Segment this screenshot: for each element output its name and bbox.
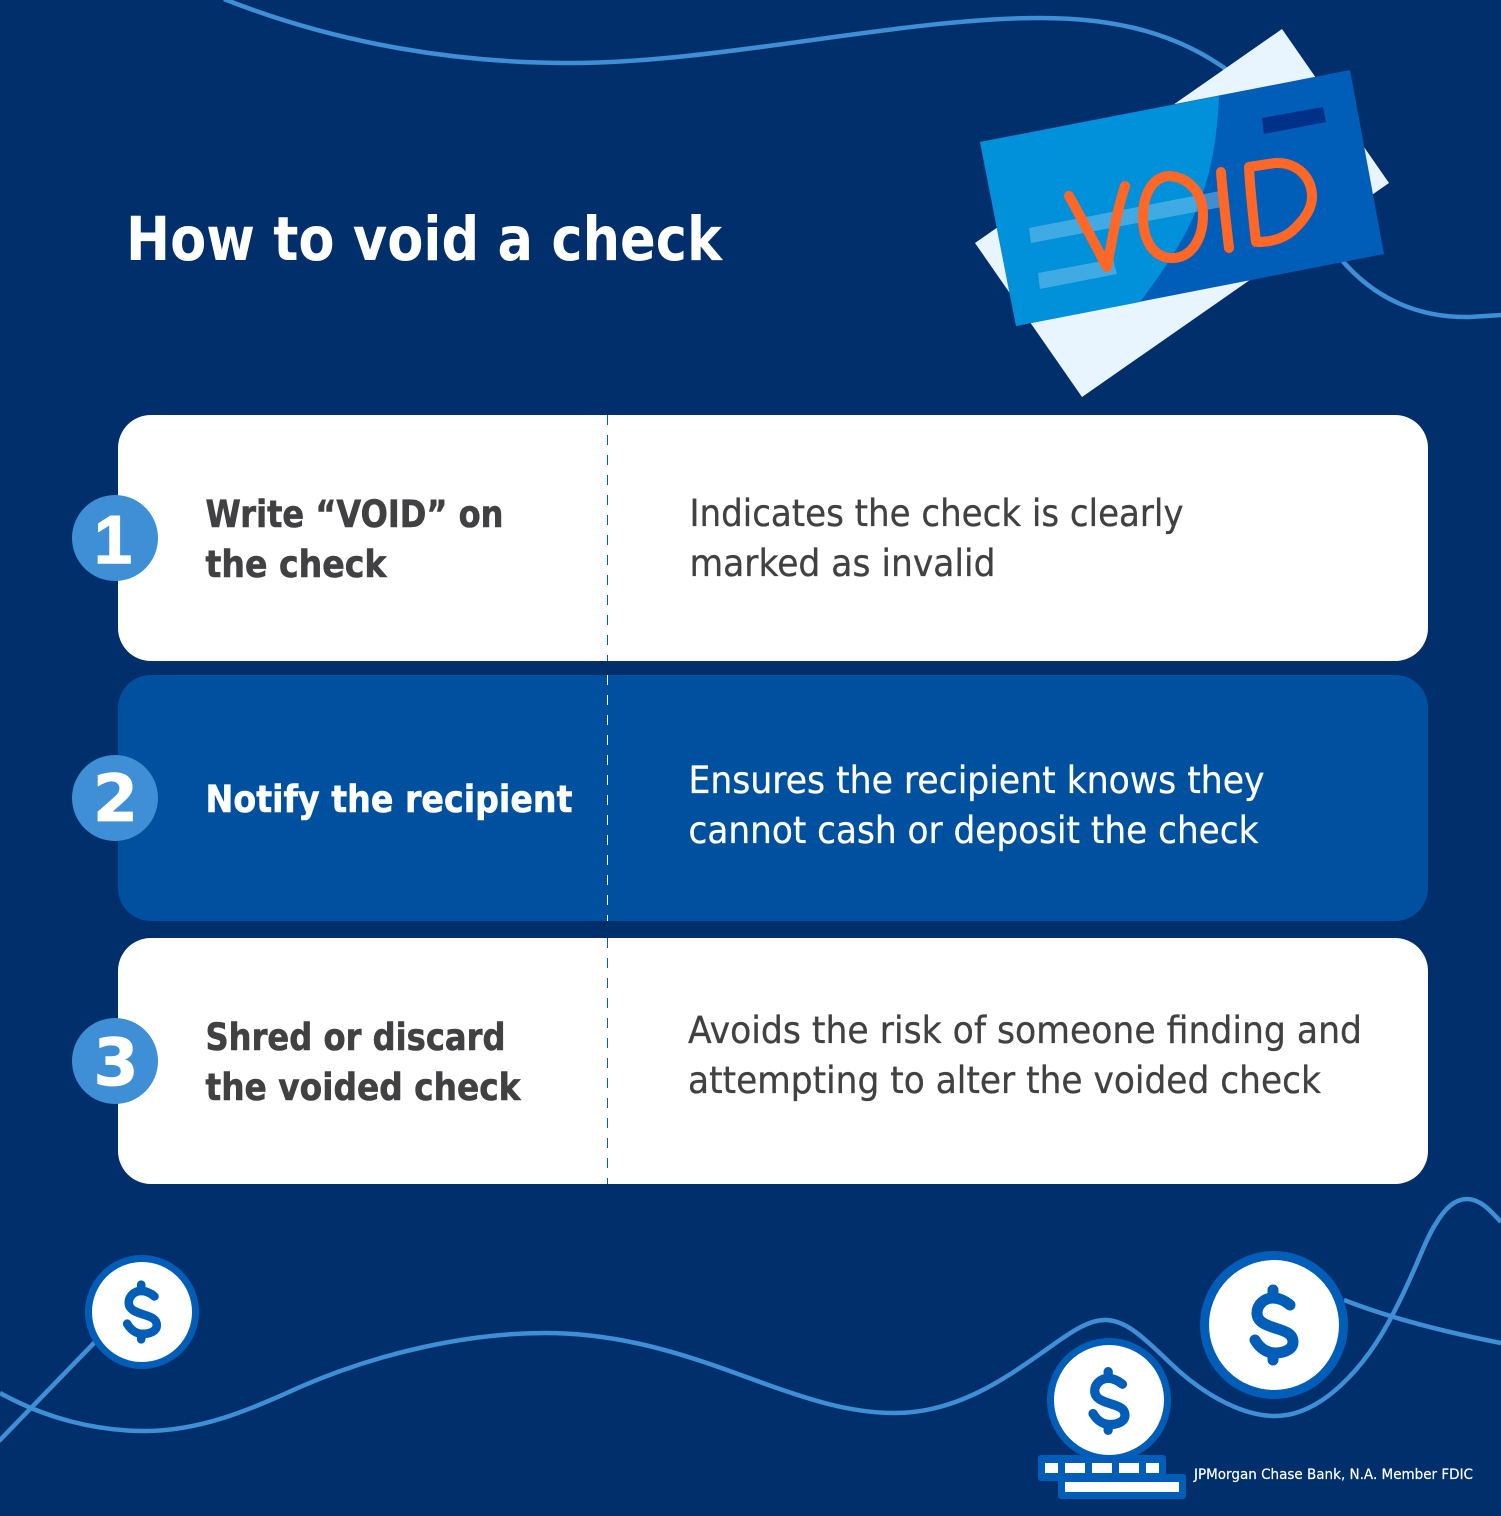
number badge 2: 2: [93, 762, 138, 837]
handwritten VOID mark: [1069, 163, 1312, 267]
step 2 description: cannot cash or deposit the check: [688, 809, 1259, 852]
step 1 description: Indicates the check is clearly: [690, 492, 1184, 535]
step 3 heading: the voided check: [206, 1066, 522, 1109]
check line bottom: [1038, 259, 1117, 289]
step 2 description: [688, 759, 1264, 852]
panel: step 3: [72, 938, 1428, 1184]
step divider: [606, 415, 608, 661]
number badge 1: 1: [94, 502, 132, 578]
footer disclosure: JPMorgan Chase Bank, N.A. Member FDIC: [1193, 1467, 1473, 1483]
number badge 1: [72, 495, 158, 581]
check body: [980, 70, 1384, 326]
dollar sign: [1093, 1372, 1125, 1430]
step 1 description: marked as invalid: [690, 542, 996, 585]
step 3 heading: Shred or discard: [206, 1016, 506, 1059]
icon: dollar coin large: [1204, 1256, 1344, 1394]
stacked base: [1038, 1455, 1166, 1481]
step 2 description: Ensures the recipient knows they: [688, 759, 1264, 802]
title: How to void a check: [126, 204, 723, 275]
check amount box: [1262, 107, 1326, 134]
step 3 description: Avoids the risk of someone finding and: [688, 1009, 1362, 1052]
step 2 heading: Notify the recipient: [206, 778, 572, 821]
step 3 description: [688, 1009, 1362, 1102]
card background: [118, 675, 1428, 921]
check line top: [1029, 191, 1222, 243]
coin: [1050, 1342, 1168, 1458]
step divider: [606, 675, 608, 921]
panel: step 1: [72, 415, 1428, 661]
number badge 2: [72, 755, 158, 841]
step 3 heading: [206, 1016, 522, 1109]
step 1 heading: the check: [206, 543, 388, 586]
top wave line: [224, 0, 1501, 317]
check light panel: [980, 96, 1219, 326]
icon: coin on stack: [1038, 1342, 1186, 1499]
number badge 3: 3: [93, 1026, 139, 1101]
step 1 heading: [206, 493, 504, 586]
step 3 description: attempting to alter the voided check: [688, 1059, 1322, 1102]
check backing paper: [975, 29, 1389, 397]
card background: [118, 938, 1428, 1184]
step divider: [606, 938, 608, 1184]
panel: step 2: [72, 675, 1428, 921]
step 1 description: [690, 492, 1184, 585]
icon: dollar coin left: [88, 1258, 196, 1366]
step 1 heading: Write “VOID” on: [206, 493, 504, 536]
bottom wave lines: [0, 1199, 1501, 1441]
illustration: voided check: [975, 29, 1389, 397]
number badge 3: [72, 1018, 158, 1104]
card background: [118, 415, 1428, 661]
